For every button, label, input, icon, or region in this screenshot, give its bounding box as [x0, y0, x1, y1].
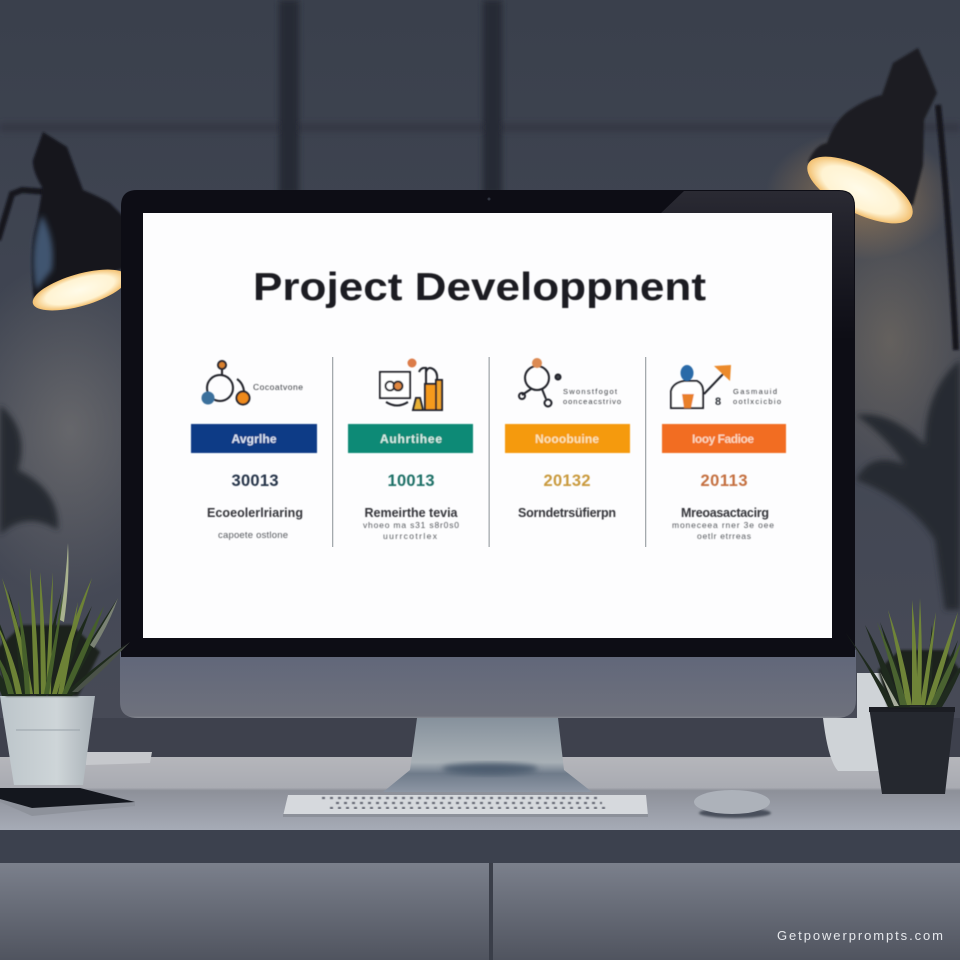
column 1 — [191, 361, 317, 541]
mouse — [694, 790, 771, 818]
icon caption: Swonstfogot — [563, 387, 618, 396]
lamp halo — [765, 130, 955, 260]
label bar: teal — [348, 424, 473, 453]
bezel glare — [660, 191, 854, 340]
column 4 — [662, 365, 786, 541]
dark foliage mass — [0, 625, 100, 696]
left plant — [0, 543, 130, 696]
lamp arm — [938, 105, 956, 350]
lamp shade highlight — [33, 215, 53, 290]
lamp arm — [0, 190, 48, 240]
desk front edge — [0, 830, 960, 863]
right plant pot — [869, 707, 955, 794]
year: 20113 — [700, 472, 748, 490]
white cup behind monitor — [823, 673, 892, 771]
keyboard — [283, 795, 648, 817]
column 2 — [348, 358, 473, 541]
heading: Mreoasactacirg — [681, 506, 769, 520]
phone on desk — [0, 788, 135, 816]
icon accent — [408, 358, 416, 368]
grey stray blades — [72, 642, 130, 692]
column 4: oetlr etrreas — [697, 531, 751, 541]
desk top — [0, 757, 960, 830]
notepad on desk — [86, 752, 152, 765]
description: moneceea rner 3e oee — [672, 520, 774, 530]
label bar: blue — [191, 424, 317, 453]
dividers — [332, 357, 646, 547]
label bar: orange — [662, 424, 786, 453]
year: 30013 — [232, 472, 278, 490]
heading: Ecoeolerlriaring — [207, 506, 303, 520]
icon extra glyph: 8 — [715, 396, 721, 408]
year: 10013 — [388, 472, 434, 490]
right desk lamp — [765, 48, 956, 350]
lamp bulb glow — [28, 261, 132, 319]
lamp bulb glow — [798, 143, 922, 237]
bar label: Nooobuine — [535, 432, 599, 446]
tall pale blade — [60, 543, 68, 622]
screen — [143, 213, 832, 638]
icon: computer and chart — [380, 368, 442, 410]
monitor stand — [383, 718, 592, 792]
icon: person with rising arrow — [671, 365, 731, 408]
background wall — [0, 0, 960, 760]
bar label: Avgrlhe — [232, 432, 277, 446]
lamp shade — [808, 48, 937, 205]
bar label: Auhrtihee — [380, 432, 442, 446]
title: Project Developpnent — [253, 266, 706, 309]
dark foliage mass — [878, 650, 960, 707]
heading: Remeirthe tevia — [364, 506, 459, 520]
column 2: uurrcotrlex — [383, 531, 438, 541]
left plant pot — [0, 696, 95, 785]
pale stem highlight — [880, 672, 899, 706]
description: capoete ostlone — [218, 530, 288, 541]
icon: magnifier — [519, 359, 560, 406]
right plant — [845, 598, 960, 707]
column 4: ootlxcicbio — [733, 397, 781, 406]
description: vhoeo ma s31 s8r0s0 — [363, 520, 459, 530]
icon caption: Gasmauid — [733, 387, 777, 396]
monitor chin — [120, 650, 856, 718]
heading: Sorndetrsüfierpn — [518, 506, 616, 520]
desk — [0, 757, 960, 960]
icon: network nodes — [202, 361, 250, 404]
left desk lamp — [0, 132, 132, 319]
blurred background plants — [0, 360, 960, 610]
bar label: Iooy Fadioe — [692, 432, 754, 446]
column 3 — [505, 359, 630, 520]
watermark: Getpowerprompts.com — [777, 928, 943, 943]
band below monitor — [0, 718, 960, 758]
monitor bezel — [121, 190, 855, 657]
floor panels — [0, 863, 960, 960]
column 3: oonceacstrivo — [563, 397, 621, 406]
label bar: amber — [505, 424, 630, 453]
lamp shade — [31, 132, 124, 300]
year: 20132 — [544, 472, 590, 490]
icon caption: Cocoatvone — [253, 382, 303, 392]
monitor — [120, 190, 856, 718]
